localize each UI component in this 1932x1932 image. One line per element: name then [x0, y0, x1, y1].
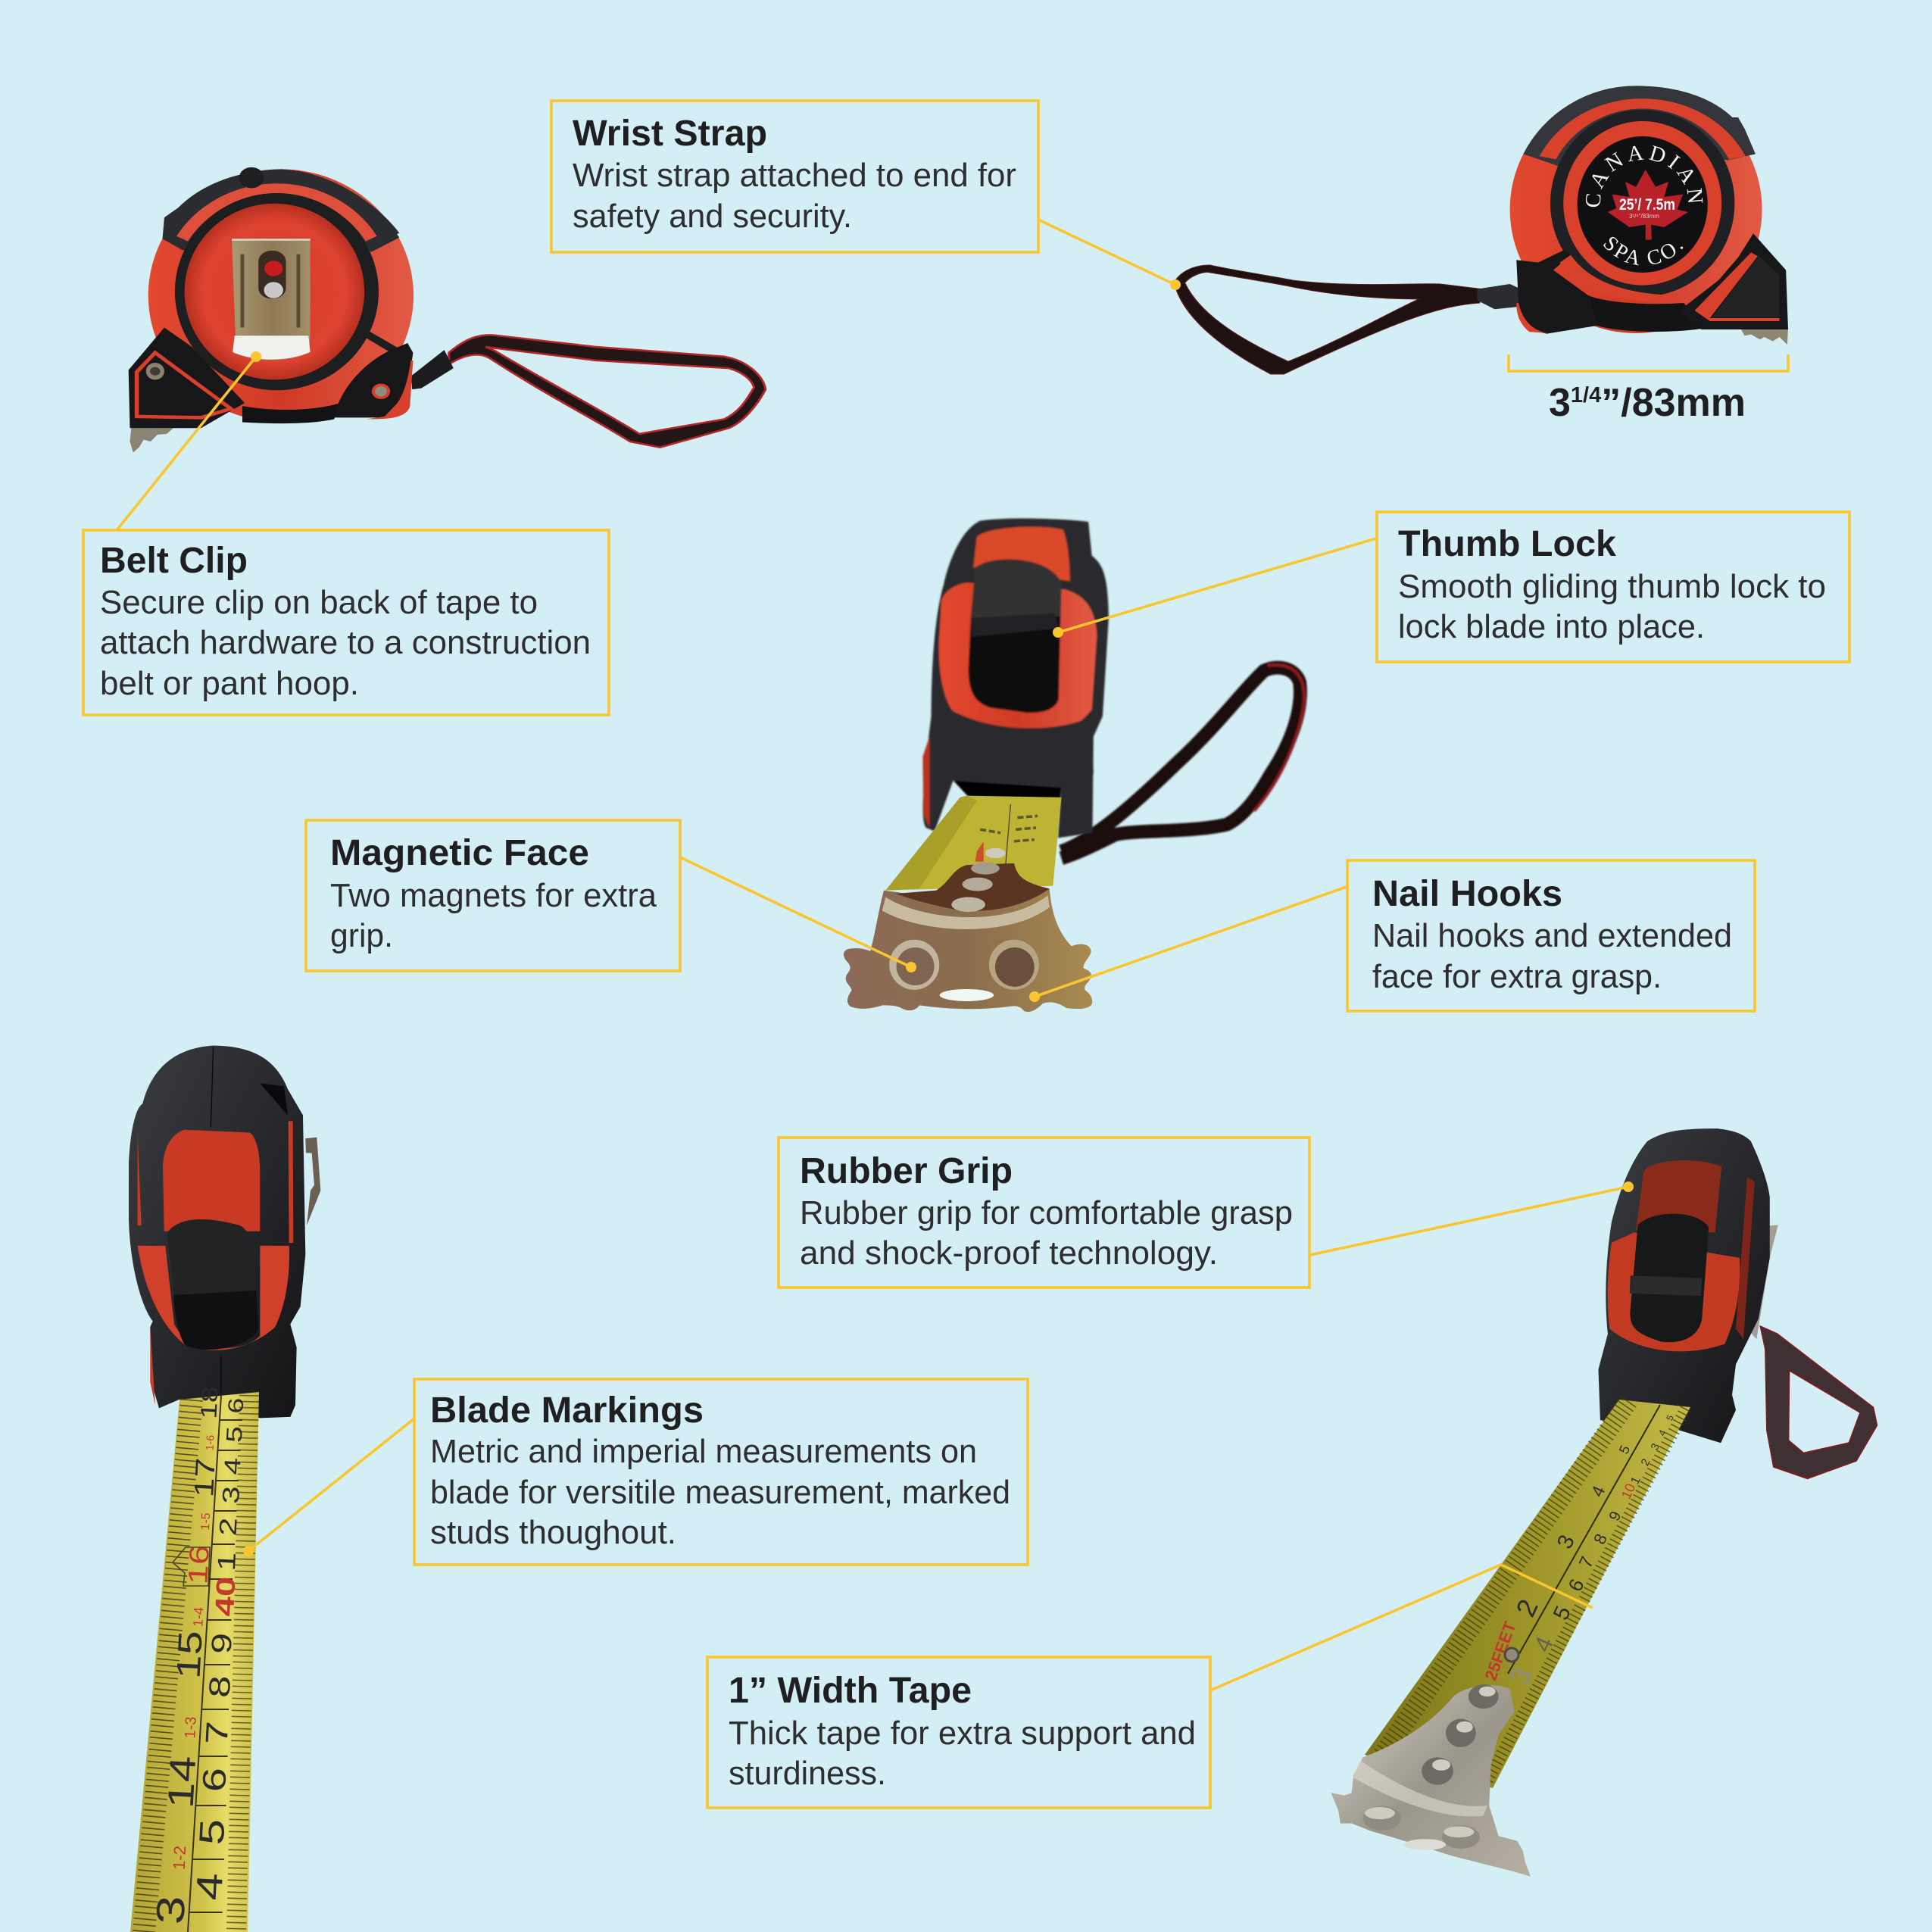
description: and shock-proof technology.: [800, 1234, 1218, 1272]
description: lock blade into place.: [1398, 608, 1705, 645]
digits, right column: [1503, 1413, 1676, 1690]
digits, left column: 5: [1616, 1443, 1633, 1456]
right column digits: 6: [224, 1397, 248, 1414]
right column digits: 40: [209, 1576, 241, 1617]
logo size text: 25’/ 7.5m: [1619, 196, 1675, 214]
digits, right column: 1: [1628, 1475, 1643, 1487]
description: [1372, 917, 1732, 995]
tape length mark: 25FEET: [1481, 1618, 1520, 1683]
description: face for extra grasp.: [1372, 958, 1662, 995]
digits, left column: 2: [1509, 1594, 1544, 1621]
panel: Thumb Lock: [1377, 512, 1849, 662]
small red foot marks: 1-4: [190, 1606, 207, 1628]
heading: 1” Width Tape: [729, 1671, 972, 1711]
right column digits: 3: [217, 1485, 245, 1505]
description: [100, 584, 591, 702]
digits, right column: 9: [1606, 1509, 1625, 1524]
left column digits: 15: [170, 1630, 209, 1680]
heading: Magnetic Face: [330, 833, 589, 873]
hook teeth: [1740, 328, 1788, 345]
blade, angled: [1365, 1400, 1690, 1788]
description: [729, 1715, 1196, 1792]
tape blade, top view: [885, 796, 1061, 891]
small red foot marks: 1-3: [182, 1716, 200, 1739]
callout line: Thumb Lock: [1053, 538, 1376, 638]
digits, right column: 3: [1503, 1662, 1538, 1690]
digits, right column: 4: [1528, 1632, 1559, 1656]
digits, right column: 5: [1664, 1413, 1676, 1422]
photo: tape measure upright with blade markings: [129, 1046, 320, 1932]
digits, left column: [1509, 1443, 1633, 1621]
callout line: Blade Markings: [243, 1419, 414, 1556]
left column digits: 3: [148, 1895, 193, 1925]
small red foot marks: 1-5: [199, 1512, 213, 1531]
description: Metric and imperial measurements on: [430, 1433, 977, 1470]
panel: 1 inch Width Tape: [707, 1657, 1210, 1808]
right column digits: [189, 1397, 248, 1901]
description: studs thoughout.: [430, 1514, 676, 1551]
callout line: Belt Clip: [117, 351, 261, 529]
digits, right column: 8: [1590, 1531, 1611, 1547]
digits, right column: 7: [1575, 1553, 1598, 1572]
description: attach hardware to a construction: [100, 624, 591, 661]
photo: tape measure back view with belt clip: [129, 167, 766, 452]
hook, top view: [844, 848, 1092, 1012]
left column digits: 18: [197, 1385, 223, 1420]
panel: Magnetic Face: [306, 820, 680, 971]
dimension label: ”/83mm: [1601, 381, 1746, 425]
heading: Rubber Grip: [800, 1151, 1013, 1191]
left column digits: 17: [188, 1457, 221, 1498]
description: grip.: [330, 917, 393, 954]
housing: [922, 519, 1109, 838]
right column digits: 6: [195, 1767, 233, 1793]
teeth of hook: [130, 428, 173, 452]
description: [330, 877, 657, 954]
digits, right column: 6: [1563, 1575, 1589, 1595]
description: [573, 157, 1016, 235]
dimension label: 1/4: [1571, 383, 1601, 407]
callout line: Magnetic Face: [680, 857, 916, 972]
description: [1398, 568, 1826, 645]
heading: Blade Markings: [430, 1390, 704, 1431]
dimension label: 3: [1549, 381, 1571, 425]
brand arc bottom: SPA CO.: [1603, 236, 1683, 265]
right column digits: 4: [220, 1457, 245, 1475]
digits, right column: 5: [1549, 1603, 1576, 1624]
right column digits: 5: [192, 1818, 233, 1846]
blade, upright: [130, 1385, 259, 1932]
digits, right column: 10: [1618, 1481, 1638, 1501]
description: [430, 1433, 1010, 1551]
panel: Blade Markings: [414, 1379, 1028, 1565]
description: Secure clip on back of tape to: [100, 584, 538, 621]
logo: [1586, 145, 1703, 265]
wrist strap, back view: [411, 335, 766, 448]
housing: [129, 167, 414, 428]
wrist strap, angled: [1760, 1326, 1877, 1478]
description: safety and security.: [573, 198, 852, 235]
description: Wrist strap attached to end for: [573, 157, 1016, 194]
small red foot marks: 1-2: [170, 1845, 189, 1871]
heading: Belt Clip: [100, 541, 248, 581]
photo: tape measure front view with logo: [1175, 86, 1788, 374]
description: blade for versitile measurement, marked: [430, 1474, 1010, 1511]
digits, right column: 4: [1656, 1428, 1668, 1437]
description: Nail hooks and extended: [1372, 917, 1732, 954]
right column digits: 9: [206, 1632, 238, 1655]
left column digits: 16: [182, 1544, 215, 1585]
body, angled: [1598, 1128, 1877, 1478]
brand arc top: CANADIAN: [1586, 145, 1703, 208]
housing and strap, front view: [1175, 86, 1788, 374]
description: sturdiness.: [729, 1755, 886, 1792]
left foot: [129, 328, 245, 428]
left column digits: 14: [160, 1755, 204, 1809]
digits, right column: 2: [1639, 1457, 1653, 1468]
logo small dimension: 3¹/⁴”/83mm: [1629, 213, 1659, 220]
description: belt or pant hoop.: [100, 665, 359, 702]
description: Rubber grip for comfortable grasp: [800, 1194, 1293, 1231]
panel: Wrist Strap: [551, 101, 1038, 252]
right column digits: 4: [189, 1872, 231, 1901]
description: Thick tape for extra support and: [729, 1715, 1196, 1752]
digits, left column: 3: [1553, 1531, 1580, 1553]
maple leaf: [1608, 170, 1688, 240]
panel: Rubber Grip: [779, 1138, 1309, 1287]
grommet: [1505, 1648, 1518, 1662]
callout line: Wrist Strap: [1038, 220, 1181, 290]
right column digits: 5: [222, 1425, 248, 1444]
description: Smooth gliding thumb lock to: [1398, 568, 1826, 605]
panel: Nail Hooks: [1347, 860, 1755, 1011]
wrist strap, front view: [1175, 265, 1521, 374]
left column digits: [148, 1385, 223, 1925]
photo: tape measure angled with extended blade: [1331, 1128, 1877, 1877]
photo: tape measure top view with extended hook: [844, 519, 1304, 1012]
right column digits: 1: [213, 1552, 242, 1572]
small red foot marks: 1-6: [203, 1434, 217, 1451]
housing, upright: [129, 1046, 320, 1418]
belt clip: [232, 239, 311, 360]
callout line: 1 inch Width Tape: [1210, 1565, 1593, 1690]
callout line: Nail Hooks: [1029, 887, 1347, 1002]
right column digits: 7: [199, 1720, 236, 1746]
right column digits: 2: [215, 1517, 242, 1537]
digits, left column: 4: [1587, 1483, 1609, 1500]
heading: Thumb Lock: [1398, 524, 1616, 564]
heading: Nail Hooks: [1372, 874, 1562, 914]
description: Two magnets for extra: [330, 877, 657, 914]
callout line: Rubber Grip: [1310, 1181, 1634, 1255]
16 foot arrow marker: [173, 1547, 210, 1586]
heading: Wrist Strap: [573, 114, 767, 154]
wrist strap, top view: [1061, 665, 1304, 858]
digits, right column: 3: [1648, 1441, 1662, 1452]
description: [800, 1194, 1293, 1272]
dimension bracket: [1509, 354, 1788, 371]
hook, angled: [1331, 1684, 1531, 1877]
right foot: [1680, 233, 1788, 329]
right column digits: 8: [202, 1675, 237, 1699]
panel: Belt Clip: [83, 530, 609, 715]
small red foot marks: [170, 1434, 217, 1871]
